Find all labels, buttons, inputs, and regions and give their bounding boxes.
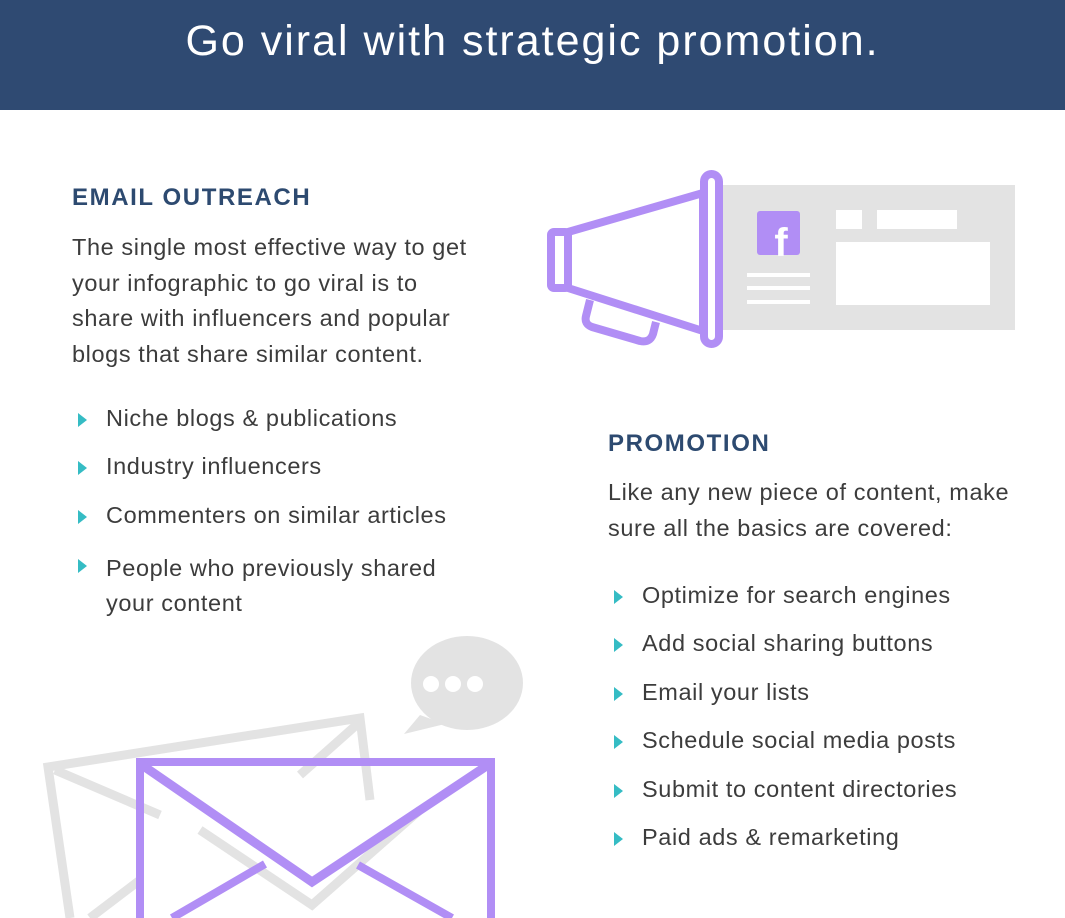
body text: The single most effective way to get xyxy=(72,234,467,260)
body text: blogs that share similar content. xyxy=(72,340,424,366)
back envelope xyxy=(48,718,420,918)
megaphone xyxy=(551,174,719,344)
bullet list: Add social sharing buttons xyxy=(642,630,933,656)
bullet list: your content xyxy=(106,590,243,616)
body text: share with influencers and popular xyxy=(72,305,450,331)
bullet list: People who previously shared xyxy=(106,555,436,581)
body text xyxy=(608,479,1009,540)
bullet list: Optimize for search engines xyxy=(642,582,951,608)
body text xyxy=(72,234,467,367)
bullet list: Industry influencers xyxy=(106,453,322,479)
body text: sure all the basics are covered: xyxy=(608,514,952,540)
front envelope xyxy=(140,762,491,918)
body text: your infographic to go viral is to xyxy=(72,270,418,296)
bullet list: Submit to content directories xyxy=(642,776,957,802)
bullet list: Commenters on similar articles xyxy=(106,502,447,528)
bullet list: Niche blogs & publications xyxy=(106,405,397,431)
bullet list xyxy=(78,405,447,616)
header banner xyxy=(0,0,1065,110)
bullet list: Paid ads & remarketing xyxy=(642,824,899,850)
facebook post card xyxy=(722,185,1015,330)
panel: promotion text xyxy=(608,430,1009,850)
icon: envelopes with speech bubble xyxy=(48,636,523,918)
heading: email outreach: EMAIL OUTREACH xyxy=(72,184,311,211)
bullet list: Email your lists xyxy=(642,679,810,705)
panel: email outreach text xyxy=(72,184,467,616)
body text: Like any new piece of content, make xyxy=(608,479,1009,505)
bullet list: Schedule social media posts xyxy=(642,727,956,753)
speech bubble xyxy=(404,636,523,734)
facebook post card: f xyxy=(774,221,788,265)
title: Go viral with strategic promotion. xyxy=(185,17,880,65)
heading: promotion: PROMOTION xyxy=(608,430,770,457)
bullet list xyxy=(614,582,957,850)
